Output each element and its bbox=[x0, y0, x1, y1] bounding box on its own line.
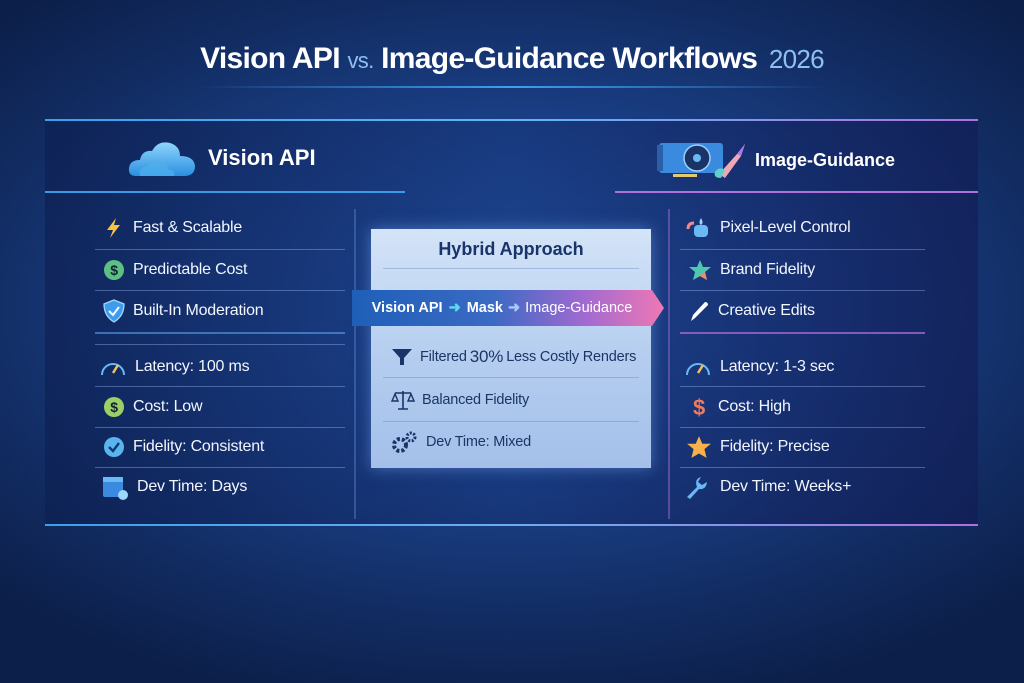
item: Dev Time Mixed: Dev Time: Mixed bbox=[426, 434, 531, 450]
item: Filtered: 30% bbox=[470, 347, 503, 366]
item: Balanced Fidelity: Balanced Fidelity bbox=[422, 392, 529, 408]
row: Predictable Cost bbox=[104, 260, 248, 280]
icon: cloud bbox=[128, 142, 195, 176]
row: Dev Time Days bbox=[103, 477, 247, 500]
row: Pixel-Level Control: Pixel-Level Control bbox=[720, 219, 850, 236]
row: Cost Low: $ bbox=[110, 399, 118, 415]
row: Fidelity Precise bbox=[687, 436, 830, 458]
row: Dev Time Weeks+: Dev Time: Weeks+ bbox=[720, 478, 851, 495]
title: Vision API vs. Image-Guidance Workflows 2026 bbox=[200, 42, 824, 75]
row: Built-In Moderation bbox=[103, 299, 264, 323]
main panel bbox=[45, 119, 978, 526]
heading: Hybrid Approach: Hybrid Approach bbox=[438, 239, 584, 259]
header: Image-Guidance bbox=[657, 143, 895, 178]
row: Dev Time Weeks+ bbox=[687, 477, 851, 499]
row: Latency: Latency: 100 ms bbox=[135, 358, 249, 375]
arrow banner: Vision API → Mask → Image-Guidance: ➜ bbox=[449, 300, 461, 316]
row: Creative Edits: Creative Edits bbox=[718, 302, 815, 319]
row: Brand Fidelity bbox=[689, 260, 816, 280]
row: Cost High bbox=[693, 395, 791, 419]
row: Cost Low bbox=[104, 397, 203, 417]
row: Latency 1-3 sec: Latency: 1-3 sec bbox=[720, 358, 834, 375]
item: Balanced Fidelity bbox=[391, 391, 530, 410]
arrow banner: Vision API → Mask → Image-Guidance: ➜ bbox=[508, 300, 520, 316]
row: Cost Low: Cost: Low bbox=[133, 398, 202, 415]
arrow banner: Vision API → Mask → Image-Guidance bbox=[352, 290, 664, 326]
header: Vision API bbox=[128, 142, 316, 176]
row: Predictable Cost: Predictable Cost bbox=[133, 261, 247, 278]
icon: gpu and brush bbox=[657, 143, 745, 178]
row: Fidelity Consistent bbox=[104, 437, 264, 457]
row: Fast & Scalable bbox=[107, 218, 242, 238]
row: Built-In Moderation: Built-In Moderation bbox=[133, 302, 264, 319]
row: Fast & Scalable: Fast & Scalable bbox=[133, 219, 242, 236]
item: Dev Time Mixed bbox=[392, 432, 531, 453]
header: Vision API: Vision API bbox=[208, 145, 316, 170]
header: Image-Guidance: Image-Guidance bbox=[755, 150, 895, 170]
row: Fidelity Consistent: Fidelity: Consistent bbox=[133, 438, 264, 455]
row: Cost High: Cost: High bbox=[718, 398, 791, 415]
left column bbox=[95, 218, 345, 500]
panel: hybrid approach bbox=[371, 229, 651, 468]
row: Fidelity Precise: Fidelity: Precise bbox=[720, 438, 830, 455]
row: Brand Fidelity: Brand Fidelity bbox=[720, 261, 815, 278]
row: Creative Edits bbox=[691, 302, 815, 321]
arrow banner: Vision API → Mask → Image-Guidance: Vision API Mask bbox=[372, 300, 503, 316]
row: Predictable Cost: $ bbox=[110, 262, 118, 278]
item: Filtered: Filtered Less Costly Renders bbox=[420, 349, 636, 365]
arrow banner: Vision API → Mask → Image-Guidance: Image-Guidance bbox=[525, 300, 632, 316]
row: Dev Time Days: Dev Time: Days bbox=[137, 478, 247, 495]
right column bbox=[680, 218, 925, 499]
